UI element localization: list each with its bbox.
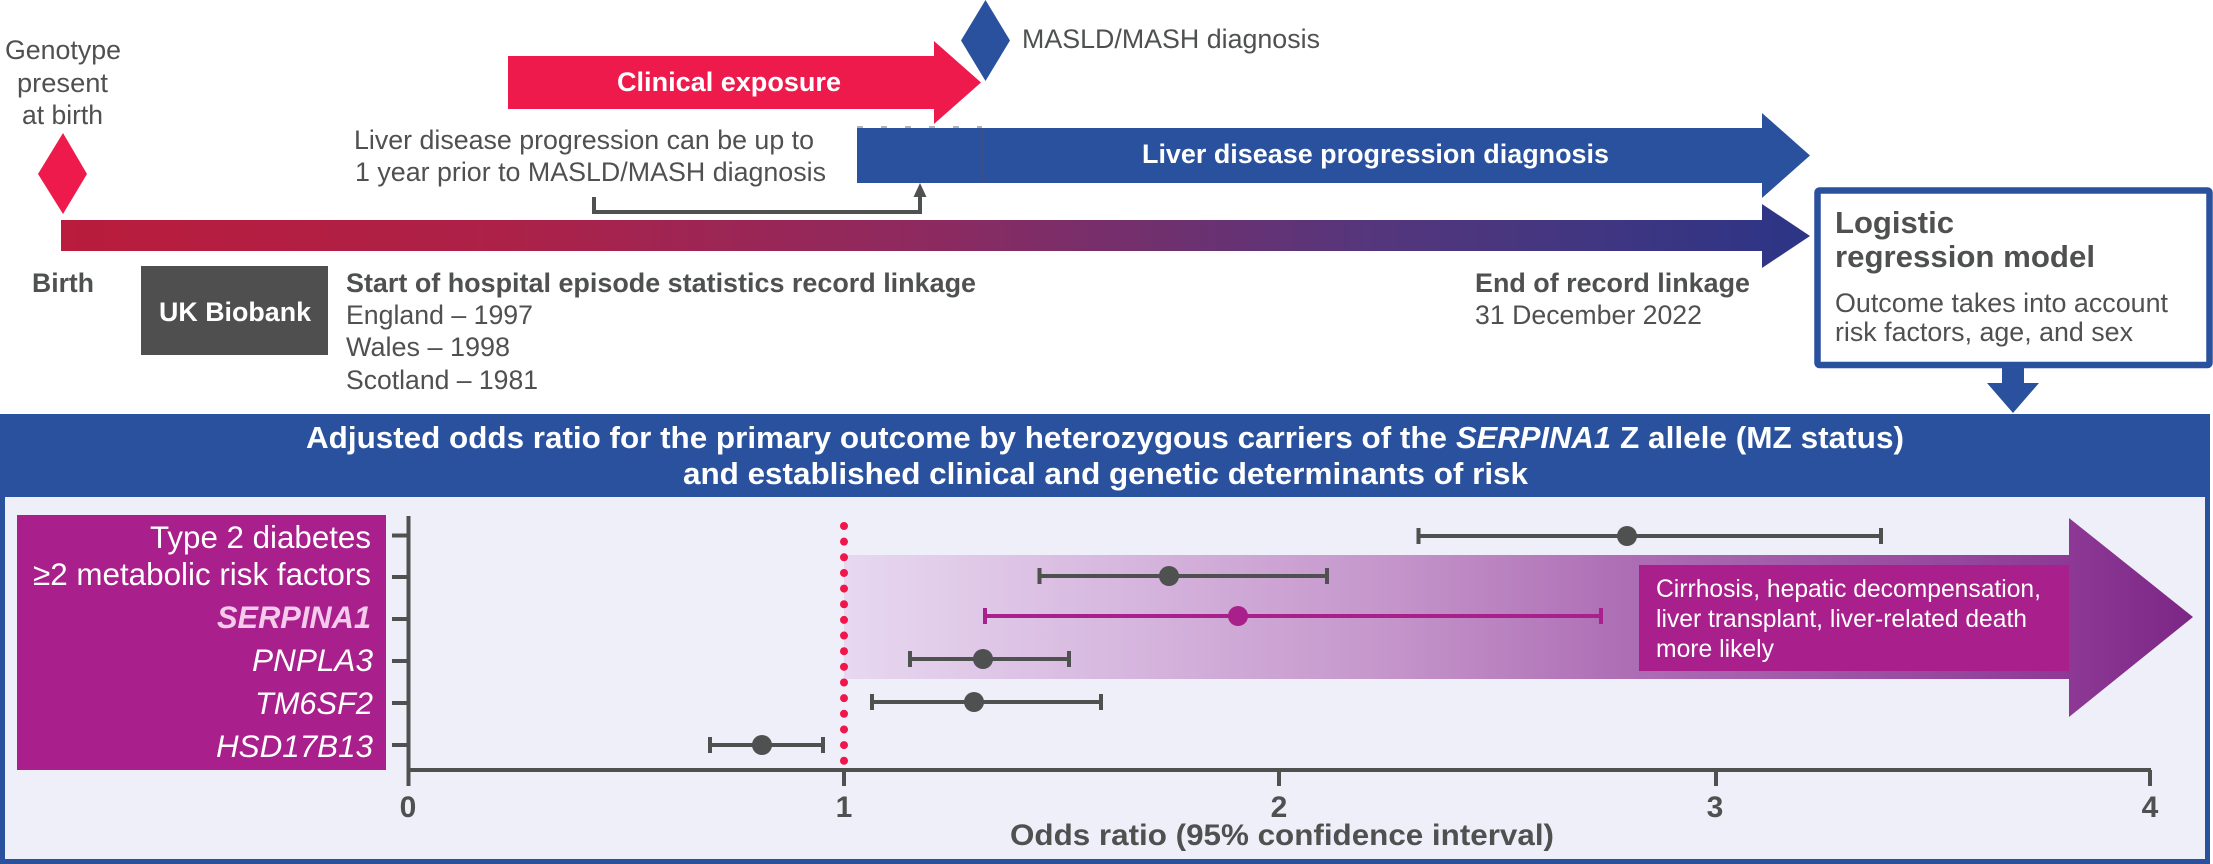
logistic regression model box: risk factors, age, and sex (1835, 317, 2133, 347)
logistic regression model box: Outcome takes into account (1835, 288, 2168, 318)
down arrow to results panel (1987, 368, 2039, 413)
x axis tick labels: 3 (1707, 791, 1723, 824)
panel heading (306, 420, 1904, 491)
x axis tick labels: 0 (400, 791, 416, 824)
row labels panel: PNPLA3 (252, 642, 373, 678)
liver disease progression note (354, 125, 826, 187)
clinical exposure arrow (508, 41, 981, 124)
callout: outcomes more likely: more likely (1656, 635, 1774, 663)
liver disease progression note: Liver disease progression can be up to (354, 125, 814, 155)
genotype label (5, 35, 121, 130)
row labels panel (17, 515, 386, 770)
logistic regression model box: Logistic (1835, 205, 1954, 240)
x axis tick labels: 2 (1271, 791, 1287, 824)
data: PNPLA3 (910, 649, 1069, 669)
data: HSD17B13 (710, 735, 823, 755)
x axis tick labels: 1 (836, 791, 852, 824)
liver disease progression arrow: Liver disease progression diagnosis (1142, 139, 1609, 169)
logistic regression model box (1818, 190, 2210, 365)
record linkage start: Start of hospital episode statistics record linkage (346, 268, 976, 298)
risk direction arrow (844, 518, 2193, 717)
clinical exposure arrow: Clinical exposure (617, 67, 841, 97)
bracket arrow (594, 183, 926, 212)
liver disease progression note: 1 year prior to MASLD/MASH diagnosis (355, 157, 826, 187)
row labels panel: Type 2 diabetes (150, 519, 371, 555)
record linkage start: Scotland – 1981 (346, 365, 538, 395)
timeline arrow (61, 204, 1810, 268)
data: metabolic risk factors (1040, 566, 1327, 586)
panel heading: Z allele (MZ status) (1620, 420, 1904, 455)
callout: outcomes more likely (1639, 565, 2069, 671)
row labels panel: SERPINA1 (217, 599, 371, 635)
data: TM6SF2 (872, 692, 1101, 712)
genotype label: Genotype (5, 35, 121, 65)
panel: adjusted odds ratio (0, 414, 2210, 864)
MASLD/MASH diagnosis label: MASLD/MASH diagnosis (1022, 24, 1320, 54)
reference line at odds ratio 1 (840, 526, 848, 762)
data: type 2 diabetes (1418, 526, 1881, 546)
x axis tick labels (400, 791, 2159, 824)
chart axes (392, 516, 2151, 786)
x axis title: Odds ratio (95% confidence interval) (1010, 819, 1554, 852)
liver disease progression arrow (857, 113, 1810, 198)
panel heading: SERPINA1 (1456, 420, 1611, 455)
birth label: Birth (32, 268, 94, 298)
panel heading: and established clinical and genetic determinants of risk (683, 456, 1529, 491)
genotype label: at birth (22, 100, 103, 130)
icon: blue diamond, diagnosis (961, 0, 1010, 81)
icon: red diamond, birth (38, 133, 87, 214)
record linkage start: Wales – 1998 (346, 332, 510, 362)
record linkage start: England – 1997 (346, 300, 533, 330)
genotype label: present (17, 68, 108, 98)
panel heading: Adjusted odds ratio for the primary outcome by heterozygous carriers of the (306, 420, 1447, 455)
record linkage end: End of record linkage (1475, 268, 1750, 298)
logistic regression model box: regression model (1835, 239, 2095, 274)
UK Biobank box: UK Biobank (159, 297, 312, 327)
x axis tick labels: 4 (2142, 791, 2159, 824)
row labels panel: ≥2 metabolic risk factors (33, 556, 371, 592)
callout: outcomes more likely: Cirrhosis, hepatic decompensation, (1656, 575, 2041, 603)
record linkage end (1475, 268, 1750, 330)
row labels panel: HSD17B13 (216, 728, 373, 764)
row labels panel: TM6SF2 (255, 685, 373, 721)
data: SERPINA1 (985, 606, 1601, 626)
UK Biobank box (141, 266, 328, 355)
callout: outcomes more likely: liver transplant, liver-related death (1656, 605, 2027, 633)
record linkage start (346, 268, 976, 395)
record linkage end: 31 December 2022 (1475, 300, 1702, 330)
